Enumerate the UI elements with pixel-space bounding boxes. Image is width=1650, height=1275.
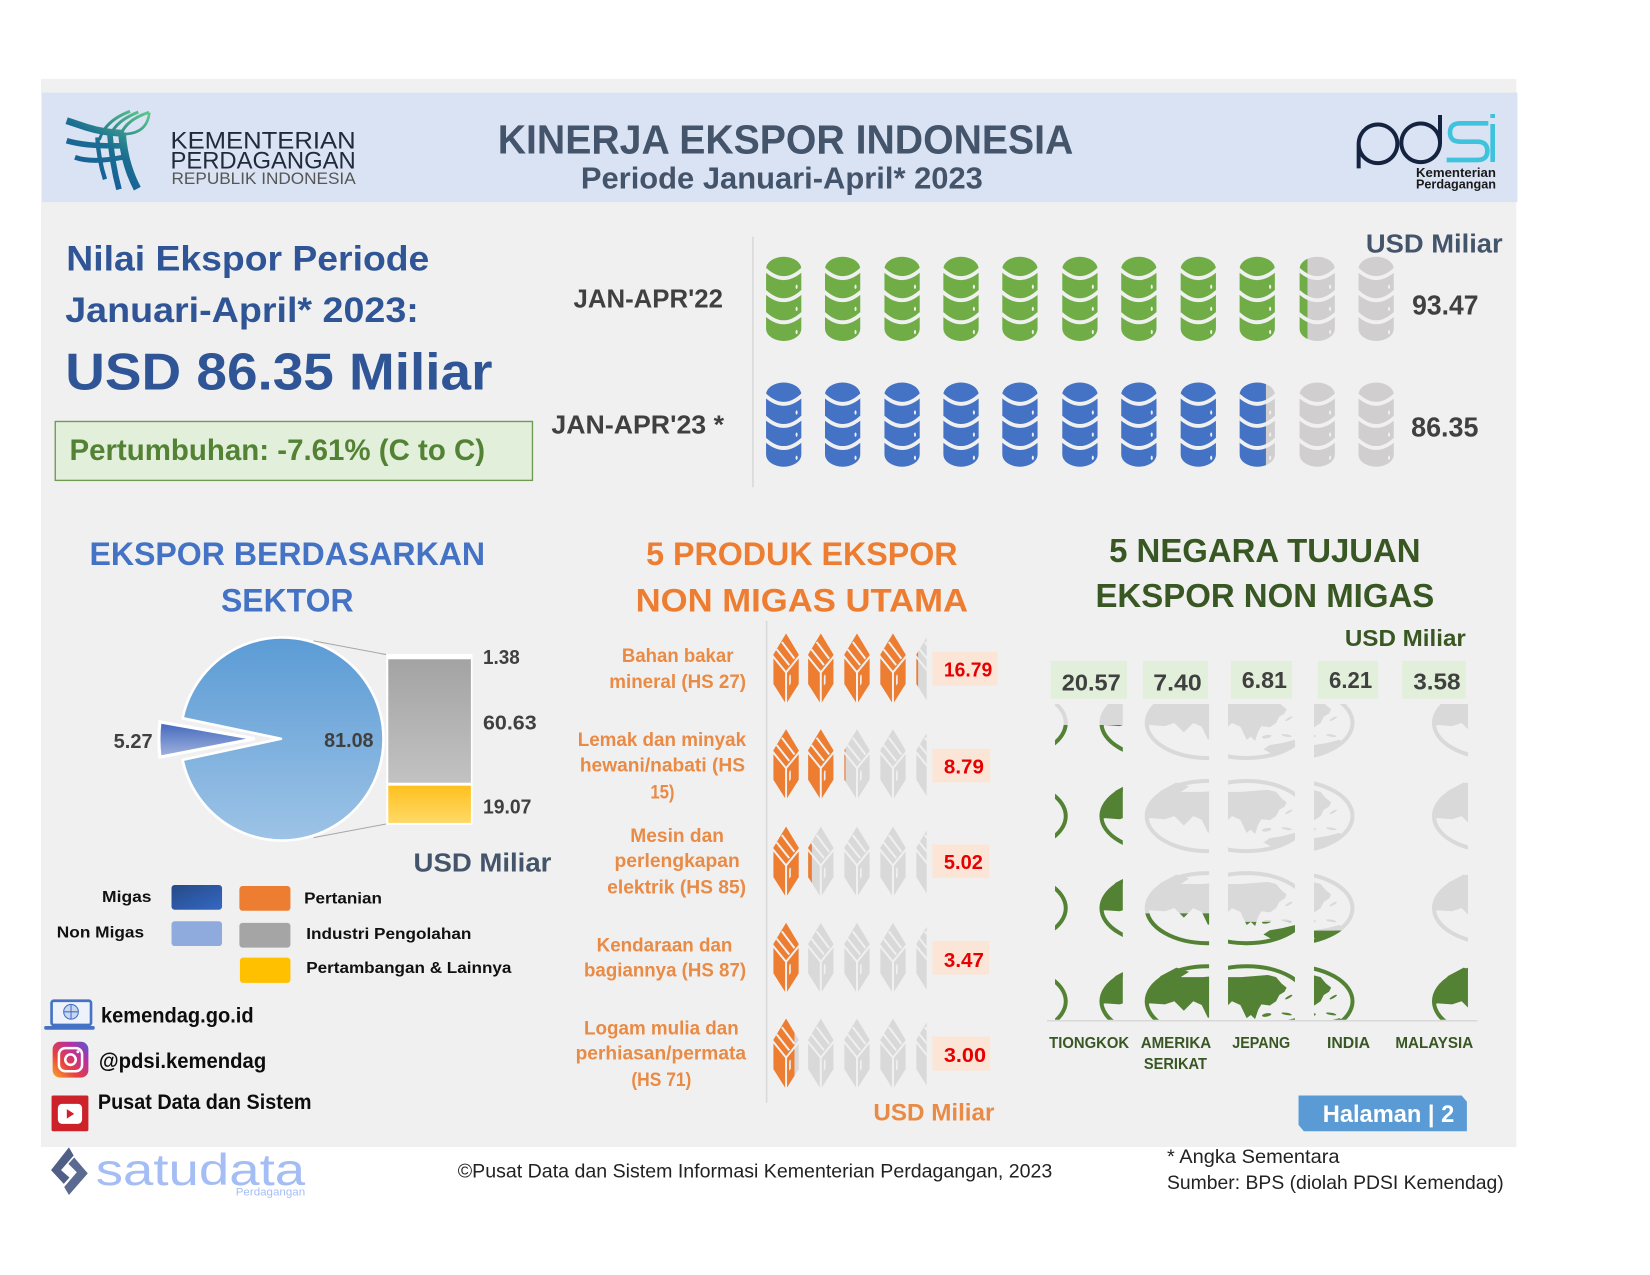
product labels: hewani/nabati (HS [580, 755, 745, 776]
value tags: 6.81 [1242, 667, 1287, 693]
heading line 2: Januari-April* 2023: [65, 291, 419, 330]
logo: satudata: satudata [96, 1146, 306, 1195]
website: kemendag.go.id [101, 1004, 254, 1027]
product labels: mineral (HS 27) [609, 672, 746, 693]
product labels: Logam mulia dan [584, 1018, 739, 1039]
growth callout [55, 421, 532, 480]
copyright: ©Pusat Data dan Sistem Informasi Kementerian Perdagangan, 2023 [458, 1162, 1052, 1183]
value labels: 1.38 [483, 647, 520, 669]
header band [42, 93, 1517, 202]
value tags: 8.79 [944, 756, 984, 778]
heading: 5 PRODUK EKSPOR [646, 535, 958, 572]
instagram handle: @pdsi.kemendag [99, 1050, 266, 1073]
heading line 2: EKSPOR NON MIGAS [1095, 578, 1434, 615]
source: Sumber: BPS (diolah PDSI Kemendag) [1167, 1173, 1504, 1194]
big number: USD 86.35 Miliar [65, 342, 492, 400]
barrels 2022 [765, 257, 1395, 341]
row label 2023: JAN-APR'23 * [551, 410, 725, 440]
logo: satudata: Perdagangan [236, 1186, 305, 1198]
product labels: bagiannya (HS 87) [584, 961, 746, 982]
heading: Nilai Ekspor Periode [66, 239, 429, 278]
logo: Kementerian Perdagangan: PERDAGANGAN [170, 147, 356, 174]
unit label: USD Miliar [414, 847, 551, 877]
value 2023: 86.35 [1411, 412, 1478, 443]
logo: satudata [51, 1146, 306, 1198]
product labels: Kendaraan dan [597, 935, 732, 956]
value tags: 3.00 [944, 1045, 986, 1067]
product labels: Bahan bakar [622, 646, 734, 667]
country labels: AMERIKA [1141, 1035, 1211, 1052]
product labels: perhiasan/permata [576, 1044, 747, 1065]
legend: Migas [102, 889, 152, 906]
legend: Pertambangan & Lainnya [306, 960, 512, 977]
value tags: 20.57 [1062, 669, 1121, 695]
pictogram: globe column Jepang [1228, 704, 1295, 1020]
heading: EKSPOR BERDASARKAN [89, 535, 485, 572]
legend [57, 885, 512, 983]
country labels: MALAYSIA [1395, 1035, 1473, 1052]
panel: top 5 destination countries [1047, 538, 1478, 1069]
country labels: TIONGKOK [1049, 1035, 1130, 1052]
icon: youtube [52, 1095, 88, 1131]
heading: 5 NEGARA TUJUAN [1109, 533, 1421, 570]
panel: exports by sector [57, 535, 551, 983]
heading line 2: SEKTOR [221, 581, 354, 618]
pictogram: globe column Tiongkok [1055, 704, 1123, 1020]
country labels: INDIA [1327, 1035, 1370, 1052]
subtitle: Periode Januari-April* 2023 [581, 161, 983, 195]
value labels [114, 647, 537, 818]
value 2022: 93.47 [1412, 290, 1478, 321]
stacked bar [386, 654, 472, 825]
heading line 2: NON MIGAS UTAMA [636, 581, 968, 618]
value tags: 5.02 [944, 852, 983, 874]
unit label: USD Miliar [873, 1100, 995, 1127]
icon: ministry bird emblem [67, 111, 149, 189]
logo text: KEMENTERIAN [170, 127, 356, 154]
panel: social links [44, 1001, 311, 1131]
unit label: USD Miliar [1345, 625, 1466, 651]
product labels: perlengkapan [615, 851, 740, 872]
unit label: USD Miliar [1366, 229, 1503, 259]
value tags [1051, 661, 1466, 699]
value tags: 16.79 [944, 660, 992, 682]
value tags: 3.58 [1413, 668, 1461, 694]
value labels: 19.07 [483, 796, 531, 818]
barrels 2023 [765, 383, 1395, 467]
value tags: 3.47 [944, 950, 984, 972]
pictogram: globe column India [1314, 704, 1354, 1020]
pictogram: gray boxes [794, 638, 926, 1088]
panel: top 5 products [576, 535, 998, 1127]
logo: PDSI [1359, 114, 1496, 191]
value labels: 81.08 [324, 730, 374, 752]
product labels: Mesin dan [630, 826, 724, 847]
product labels [576, 646, 747, 1091]
page tag: Halaman | 2 [1323, 1101, 1454, 1128]
product labels: elektrik (HS 85) [607, 877, 746, 898]
logo: PDSI: Perdagangan [1416, 177, 1496, 191]
logo: PDSI: Kementerian [1416, 166, 1496, 180]
background panel [41, 79, 1516, 1147]
legend: Non Migas [57, 925, 144, 942]
title: KINERJA EKSPOR INDONESIA [498, 117, 1073, 163]
value tags [932, 652, 998, 1071]
growth callout: Pertumbuhan: -7.61% (C to C) [69, 434, 485, 467]
product labels: Lemak dan minyak [578, 730, 747, 751]
page tag [1299, 1095, 1467, 1131]
value labels: 5.27 [114, 731, 153, 753]
panel: barrel pictogram comparison [551, 229, 1503, 487]
icon: instagram [53, 1042, 88, 1078]
footer [51, 1146, 1504, 1198]
country labels: SERIKAT [1144, 1056, 1207, 1073]
value labels: 60.63 [483, 712, 537, 734]
pictogram: globe column Amerika Serikat [1144, 704, 1210, 1020]
country labels [1049, 1035, 1473, 1073]
pictogram: globe column Malaysia [1432, 704, 1468, 1020]
logo: Kementerian Perdagangan: REPUBLIK INDONESIA [172, 170, 356, 188]
pictogram: orange filled boxes [773, 634, 918, 1088]
product labels: 15) [650, 783, 675, 804]
value tags: 7.40 [1153, 669, 1202, 695]
youtube channel: Pusat Data dan Sistem [98, 1091, 311, 1114]
note: * Angka Sementara [1167, 1147, 1340, 1168]
logo: Kementerian Perdagangan [67, 111, 356, 189]
value tags: 6.21 [1329, 667, 1372, 693]
row label 2022: JAN-APR'22 [574, 283, 723, 313]
legend: Industri Pengolahan [306, 926, 471, 943]
country labels: JEPANG [1232, 1035, 1290, 1052]
product labels: (HS 71) [631, 1070, 691, 1091]
icon: laptop [44, 1001, 95, 1030]
legend: Pertanian [304, 890, 382, 907]
panel: headline export value [55, 239, 532, 480]
pie chart [159, 637, 386, 841]
